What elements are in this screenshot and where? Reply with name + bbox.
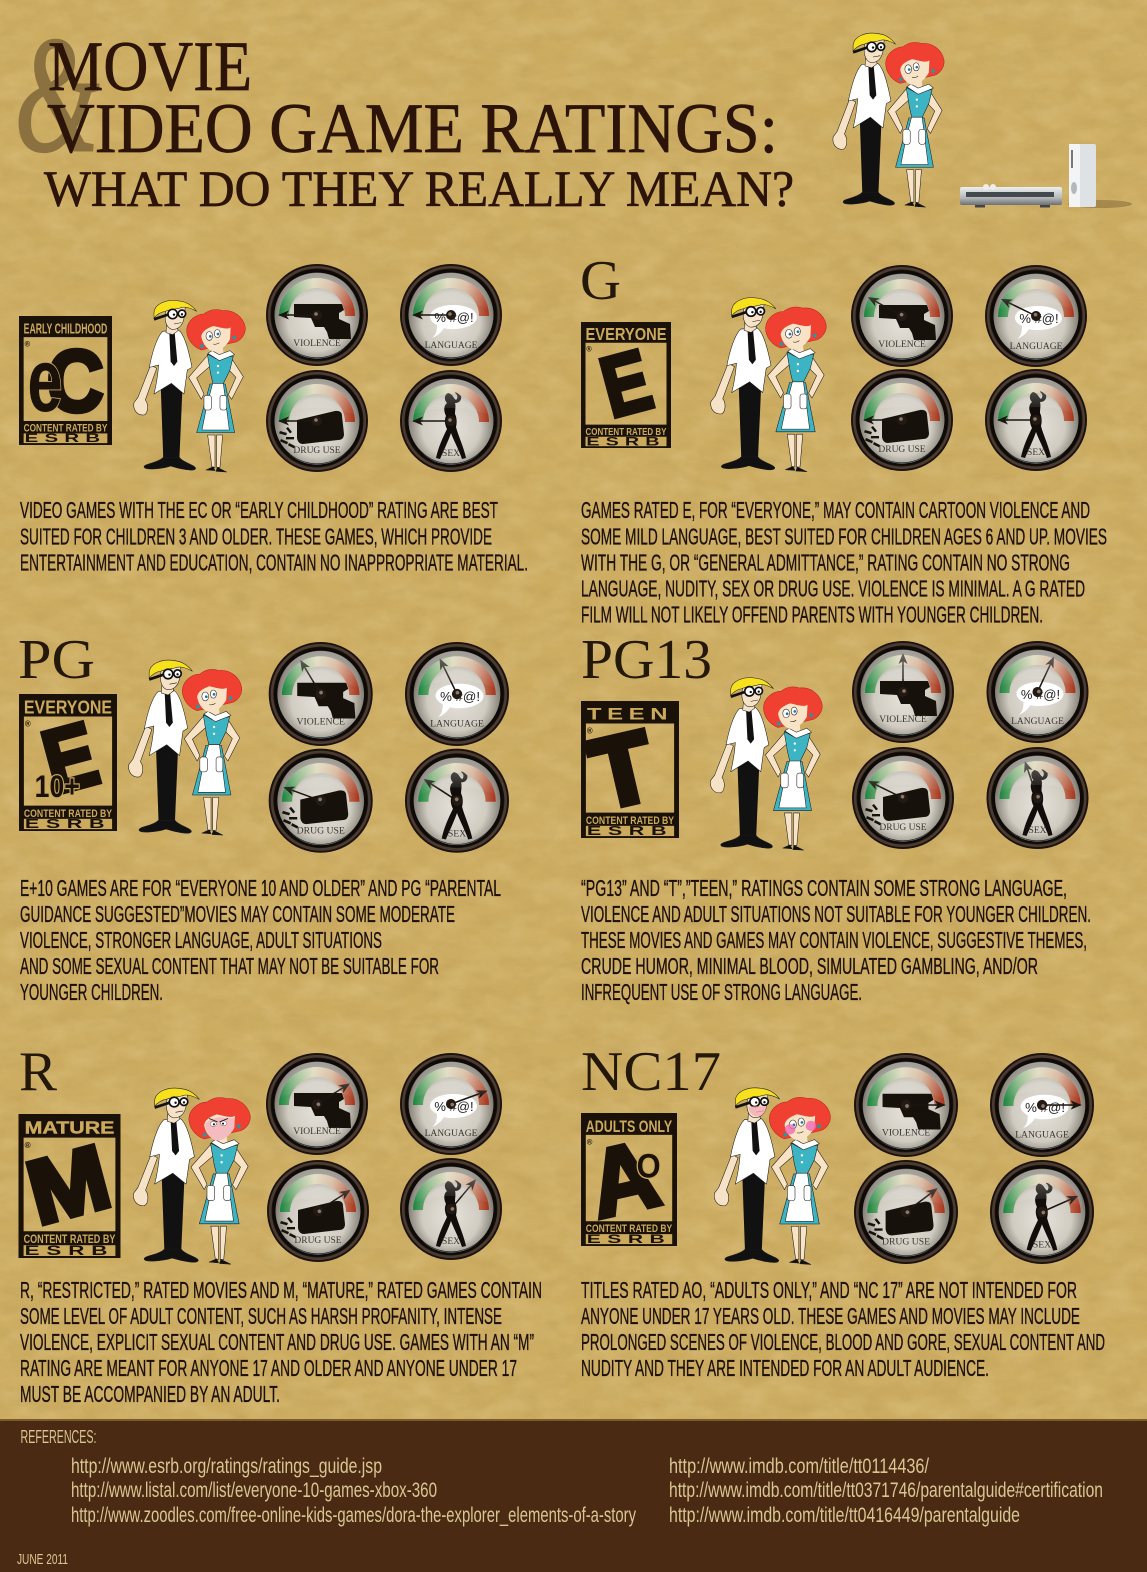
gauge: language [400, 1053, 502, 1155]
ESRB badge: mature: ® [25, 1141, 31, 1150]
reference links left: http://www.listal.com/list/everyone-10-games-xbox-360 [71, 1479, 437, 1502]
characters [710, 678, 822, 850]
gauge: violence: VIOLENCE [879, 715, 927, 725]
reference links right: http://www.imdb.com/title/tt0416449/parentalguide [669, 1504, 1020, 1527]
gauge: language: % #@! [1025, 1100, 1065, 1115]
ESRB badge: early childhood: ESRB [25, 431, 106, 445]
gauge: violence [852, 641, 954, 743]
heading: R: R [19, 1041, 58, 1103]
description: PG13: INFREQUENT USE OF STRONG LANGUAGE. [581, 979, 862, 1005]
ESRB badge: adults only: ® [587, 1137, 593, 1146]
gauge: drug use [266, 370, 368, 472]
ampersand: & [15, 3, 99, 186]
description: R: RATING ARE MEANT FOR ANYONE 17 AND OLDER AND ANYONE UNDER 17 [20, 1355, 517, 1381]
ESRB badge: teen: TEEN [587, 705, 673, 724]
ESRB badge: everyone 10+: 10+ [35, 769, 80, 804]
references heading: REFERENCES: [20, 1426, 96, 1447]
gauge: drug use: DRUG USE [878, 445, 926, 455]
ESRB badge: early childhood: C [47, 331, 104, 430]
gauge: violence: VIOLENCE [293, 1127, 341, 1137]
description: EC [20, 497, 528, 576]
ESRB badge: early childhood: CONTENT RATED BY [24, 423, 107, 435]
ESRB badge: teen: CONTENT RATED BY [586, 815, 674, 827]
characters [129, 660, 242, 835]
gauge: sex: SEX [442, 449, 460, 459]
gauge: drug use [267, 1160, 369, 1262]
gauge: drug use: DRUG USE [294, 1236, 342, 1246]
panel: PG [18, 629, 509, 1005]
description: G [581, 497, 1107, 628]
gauge: sex: SEX [448, 828, 466, 839]
description: EC: ENTERTAINMENT AND EDUCATION, CONTAIN NO INAPPROPRIATE MATERIAL. [20, 550, 528, 576]
ESRB badge: everyone: CONTENT RATED BY [585, 427, 667, 438]
ESRB badge: mature: CONTENT RATED BY [24, 1233, 116, 1246]
gauge: language: LANGUAGE [430, 719, 484, 730]
gauge: language: LANGUAGE [1010, 342, 1063, 352]
gauge: violence [854, 1053, 958, 1157]
characters [714, 1088, 830, 1264]
gauge: sex [990, 1160, 1094, 1264]
ESRB badge: early childhood [19, 316, 112, 445]
gauge: drug use: DRUG USE [297, 825, 345, 836]
heading: G: G [580, 250, 621, 312]
description: PG: VIOLENCE, STRONGER LANGUAGE, ADULT SITUATIONS [20, 927, 382, 953]
ESRB badge: everyone 10+: ® [25, 719, 31, 728]
gauge: violence: VIOLENCE [878, 340, 926, 350]
ESRB badge: everyone 10+: CONTENT RATED BY [24, 808, 112, 820]
description: PG: YOUNGER CHILDREN. [20, 979, 163, 1005]
description: PG [20, 875, 501, 1005]
gauge: language [985, 265, 1087, 367]
gauge: violence: VIOLENCE [293, 339, 341, 349]
footer: references [0, 1419, 1147, 1572]
gauge: sex: SEX [1027, 448, 1045, 458]
reference links left: http://www.zoodles.com/free-online-kids-games/dora-the-explorer_elements-of-a-story [71, 1504, 636, 1527]
characters [134, 300, 245, 472]
ESRB badge: adults only: A [579, 1121, 669, 1239]
title line: movie: MOVIE [48, 28, 252, 106]
gauge: sex [986, 747, 1088, 849]
gauge: sex [400, 370, 502, 472]
characters [133, 1088, 250, 1264]
gauge: drug use [851, 369, 953, 471]
reference links right: http://www.imdb.com/title/tt0114436/ [669, 1455, 929, 1478]
ESRB badge: adults only: ESRB [587, 1232, 671, 1246]
gauge: language: % #@! [434, 310, 474, 325]
gauge: drug use [854, 1160, 958, 1264]
gauge: violence [269, 642, 373, 746]
gauge: drug use [269, 749, 373, 853]
ESRB badge: adults only: O [637, 1148, 661, 1186]
gauge: language [405, 642, 509, 746]
characters in title [833, 33, 944, 207]
description: EC: VIDEO GAMES WITH THE EC OR “EARLY CHILDHOOD” RATING ARE BEST [20, 497, 498, 523]
gauge: language: LANGUAGE [1011, 717, 1064, 727]
gauge: language [986, 641, 1088, 743]
panel: G [580, 250, 1107, 628]
heading: PG13: PG13 [581, 629, 712, 691]
gauge: language [990, 1053, 1094, 1157]
gauge: drug use: DRUG USE [879, 823, 927, 833]
gauge: sex: SEX [442, 1237, 460, 1247]
ESRB badge: everyone 10+: ESRB [25, 816, 111, 831]
icon: game console and dvd player [960, 144, 1132, 208]
gauge: language: LANGUAGE [1015, 1130, 1069, 1141]
title line: what do they really mean: WHAT DO THEY REALLY MEAN? [44, 162, 794, 218]
reference links left: http://www.esrb.org/ratings/ratings_guide.jsp [71, 1455, 382, 1478]
ESRB badge: everyone 10+: EVERYONE [24, 697, 112, 718]
gauge: violence [266, 1053, 368, 1155]
title [15, 3, 794, 218]
ESRB badge: early childhood: e [27, 330, 63, 431]
reference links left [71, 1455, 636, 1527]
gauge: sex: SEX [1029, 826, 1047, 836]
description: PG: E+10 GAMES ARE FOR “EVERYONE 10 AND OLDER” AND PG “PARENTAL [20, 875, 501, 901]
heading: NC17: NC17 [581, 1041, 721, 1103]
description: PG: AND SOME SEXUAL CONTENT THAT MAY NOT BE SUITABLE FOR [20, 953, 439, 979]
description: PG: GUIDANCE SUGGESTED”MOVIES MAY CONTAIN SOME MODERATE [20, 901, 455, 927]
panel: EC [19, 264, 528, 576]
ESRB badge: mature: M [17, 1126, 120, 1245]
ESRB badge: everyone: ESRB [586, 435, 666, 448]
description: R: MUST BE ACCOMPANIED BY AN ADULT. [20, 1381, 280, 1407]
gauge: violence [266, 264, 368, 366]
ESRB badge: mature: ESRB [25, 1243, 114, 1258]
gauge: language: LANGUAGE [425, 1129, 478, 1139]
ESRB badge: everyone: EVERYONE [585, 325, 666, 344]
description: R [20, 1277, 542, 1407]
date: JUNE 2011 [17, 1551, 68, 1568]
ESRB badge: early childhood: ® [25, 339, 31, 348]
ESRB badge: teen: T [581, 710, 663, 830]
ESRB badge: everyone 10+: E [32, 703, 108, 814]
ESRB badge: teen: ® [587, 726, 593, 735]
ESRB badge: adults only: ADULTS ONLY [586, 1118, 672, 1136]
reference links right [669, 1455, 1103, 1527]
gauge: language: % #@! [440, 689, 480, 704]
gauge: language [400, 264, 502, 366]
ESRB badge: mature: MATURE [25, 1117, 114, 1138]
gauge: sex [985, 369, 1087, 471]
gauge: violence: VIOLENCE [297, 717, 345, 728]
ESRB badge: teen: ESRB [587, 823, 673, 838]
characters [711, 298, 826, 472]
description: R: SOME LEVEL OF ADULT CONTENT, SUCH AS HARSH PROFANITY, INTENSE [20, 1303, 502, 1329]
description: R: R, “RESTRICTED,” RATED MOVIES AND M, “MATURE,” RATED GAMES CONTAIN [20, 1277, 542, 1303]
description: R: VIOLENCE, EXPLICIT SEXUAL CONTENT AND DRUG USE. GAMES WITH AN “M” [20, 1329, 534, 1355]
gauge: sex [400, 1158, 502, 1260]
panel: NC17 [579, 1041, 1105, 1381]
description: NC17 [581, 1277, 1105, 1381]
gauge: drug use: DRUG USE [882, 1237, 930, 1248]
gauge: language: LANGUAGE [425, 341, 478, 351]
gauge: language: % #@! [1021, 687, 1060, 702]
description: PG13 [581, 875, 1091, 1005]
title line: video game ratings: VIDEO GAME RATINGS: [47, 90, 778, 168]
gauge: drug use: DRUG USE [293, 446, 341, 456]
panel: PG13 [581, 629, 1091, 1005]
gauge: sex: SEX [1033, 1240, 1051, 1251]
ESRB badge: early childhood: EARLY CHILDHOOD [24, 322, 108, 337]
ESRB badge: everyone: E [591, 332, 661, 436]
gauge: violence: VIOLENCE [882, 1128, 930, 1139]
description: EC: SUITED FOR CHILDREN 3 AND OLDER. THESE GAMES, WHICH PROVIDE [20, 524, 492, 550]
heading: PG: PG [18, 629, 95, 691]
gauge: violence [851, 265, 953, 367]
ESRB badge: everyone: ® [586, 345, 592, 354]
ESRB badge: adults only: CONTENT RATED BY [586, 1223, 673, 1235]
panel: R [17, 1041, 542, 1407]
gauge: language: % #@! [1019, 311, 1059, 326]
gauge: drug use [852, 747, 954, 849]
gauge: language: % #@! [434, 1099, 474, 1114]
gauge: sex [405, 749, 509, 853]
